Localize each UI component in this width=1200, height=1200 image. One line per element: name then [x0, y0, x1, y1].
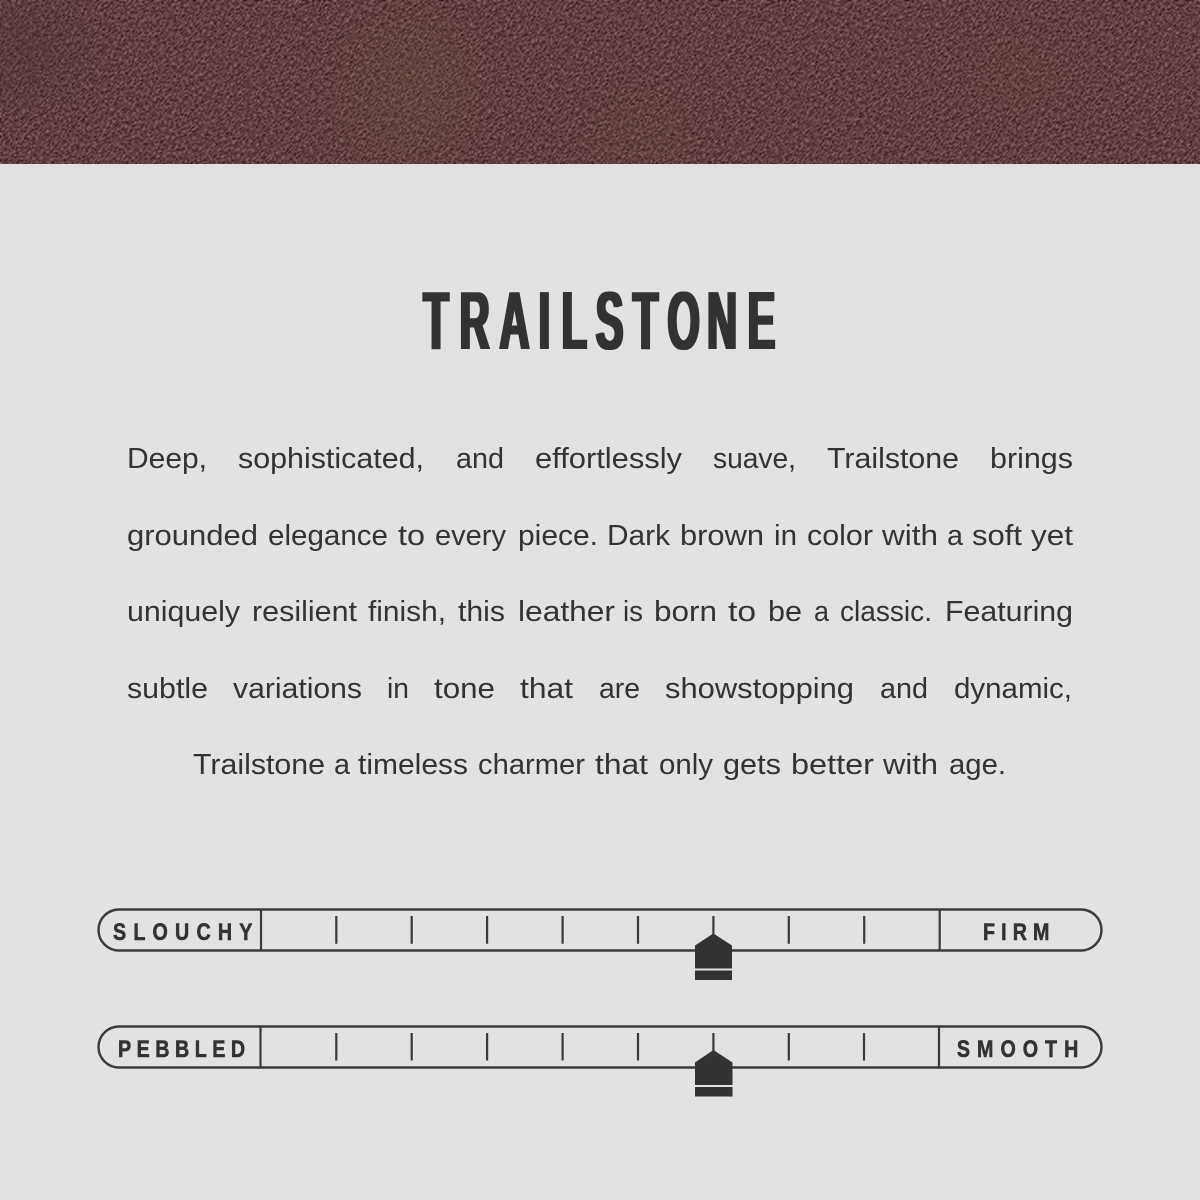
line 4: tone	[434, 673, 495, 705]
slider track	[98, 1026, 1102, 1068]
line 2	[127, 520, 1073, 552]
line 3: resilient	[252, 596, 357, 628]
line 3: is	[623, 596, 643, 628]
line 3: finish,	[368, 596, 446, 628]
line 2: elegance	[268, 520, 388, 552]
marker	[695, 1050, 732, 1096]
line 2: in	[774, 520, 797, 552]
line 5: age.	[949, 749, 1006, 781]
line 4: and	[880, 673, 928, 705]
description text	[127, 443, 1073, 781]
line 4: subtle	[127, 673, 208, 705]
slider ticks and dividers	[261, 909, 940, 951]
line 1: Deep,	[127, 443, 207, 475]
line 4: that	[520, 673, 573, 705]
line 4: are	[599, 673, 640, 705]
line 5: Trailstone	[193, 749, 325, 781]
line 2: yet	[1031, 520, 1073, 552]
line 2: brown	[680, 520, 764, 552]
line 3: leather	[518, 596, 615, 628]
line 4: in	[387, 673, 409, 705]
line 4: dynamic,	[954, 673, 1072, 705]
line 5: only	[659, 749, 714, 781]
line 3: uniquely	[127, 596, 241, 628]
marker	[695, 934, 732, 980]
line 1: Trailstone	[827, 443, 959, 475]
line 1: brings	[990, 443, 1073, 475]
line 5: gets	[723, 749, 781, 781]
line 5: that	[595, 749, 648, 781]
line 1: suave,	[713, 443, 796, 475]
slider: slouchy to firm	[98, 909, 1102, 980]
line 2: to	[398, 520, 425, 552]
line 5: with	[882, 749, 938, 781]
label: firm: FIRM	[983, 918, 1049, 945]
line 1	[127, 443, 1073, 475]
line 3	[127, 596, 1073, 628]
line 5: better	[791, 749, 874, 781]
line 4	[127, 673, 1072, 705]
line 2: piece.	[518, 520, 598, 552]
leather texture swatch	[0, 0, 1200, 164]
line 5: a	[334, 749, 351, 781]
line 3: born	[654, 596, 717, 628]
line 1: effortlessly	[535, 443, 683, 475]
line 3: to	[728, 596, 756, 628]
slider ticks and dividers	[260, 1026, 939, 1068]
label: slouchy: SLOUCHY	[113, 918, 253, 945]
label: smooth: SMOOTH	[957, 1035, 1078, 1062]
line 2: color	[807, 520, 873, 552]
line 2: soft	[972, 520, 1022, 552]
slider: pebbled to smooth	[98, 1026, 1102, 1096]
line 1: and	[456, 443, 504, 475]
line 3: be	[768, 596, 802, 628]
label: pebbled: PEBBLED	[118, 1035, 245, 1062]
line 4: showstopping	[665, 673, 854, 705]
line 3: Featuring	[945, 596, 1073, 628]
line 1: sophisticated,	[238, 443, 424, 475]
line 3: classic.	[840, 596, 932, 628]
line 2: grounded	[127, 520, 258, 552]
line 3: a	[814, 596, 830, 628]
line 5: charmer	[478, 749, 585, 781]
line 4: variations	[233, 673, 362, 705]
slider track	[98, 910, 1102, 950]
line 5: timeless	[358, 749, 468, 781]
line 3: this	[458, 596, 505, 628]
line 2: Dark	[607, 520, 671, 552]
title: TRAILSTONE	[423, 274, 775, 367]
line 2: a	[947, 520, 964, 552]
line 5	[193, 749, 1006, 781]
line 2: with	[881, 520, 938, 552]
line 2: every	[435, 520, 506, 552]
